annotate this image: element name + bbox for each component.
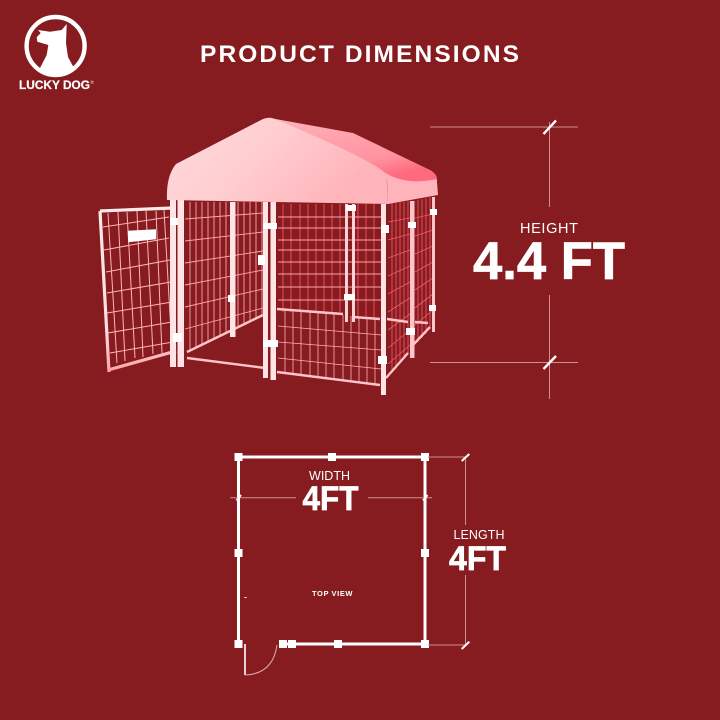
door frame bbox=[100, 208, 176, 372]
hinge post tubes bbox=[170, 200, 184, 367]
roof back slope bbox=[270, 118, 437, 181]
small mark bbox=[244, 597, 246, 598]
front right wire grid bbox=[278, 311, 381, 384]
roof front face bbox=[167, 118, 388, 204]
right side wire grids bbox=[388, 197, 433, 373]
height guide lines bbox=[430, 122, 578, 399]
kennel illustration bbox=[100, 118, 438, 395]
width tick marks bbox=[236, 495, 428, 500]
post clamps bbox=[170, 205, 437, 364]
enclosure outline bbox=[238, 457, 425, 644]
height tick marks bbox=[544, 120, 556, 369]
posts bbox=[170, 197, 437, 395]
back wire grid bbox=[283, 204, 374, 318]
left side wire grid bbox=[185, 202, 263, 350]
title: PRODUCT DIMENSIONS bbox=[200, 41, 519, 68]
bottom rails bbox=[187, 309, 430, 385]
height label: HEIGHT bbox=[520, 221, 578, 237]
door label plate bbox=[128, 229, 156, 242]
height value: 4.4 FT bbox=[473, 232, 625, 291]
roof end face bbox=[384, 170, 438, 204]
post markers bbox=[234, 453, 429, 648]
length value: 4FT bbox=[449, 540, 506, 578]
width label: WIDTH bbox=[309, 469, 350, 483]
door swing bbox=[244, 644, 246, 675]
width dimension bbox=[230, 469, 432, 518]
width guide lines bbox=[230, 497, 432, 499]
logo ring bbox=[27, 17, 85, 75]
door bbox=[100, 208, 176, 372]
length guide lines bbox=[428, 457, 466, 645]
top view plan bbox=[234, 453, 429, 675]
icon: dog silhouette bbox=[37, 24, 74, 75]
logo: Lucky Dog bbox=[19, 17, 94, 92]
left side mid post bbox=[230, 202, 236, 337]
gate posts bbox=[263, 202, 268, 378]
right side posts bbox=[410, 201, 414, 358]
door wire grid bbox=[103, 210, 173, 363]
length dimension bbox=[428, 454, 506, 649]
back wire grid rails bbox=[278, 217, 381, 300]
height dimension bbox=[430, 120, 625, 399]
front right corner post bbox=[381, 204, 386, 395]
back posts bbox=[345, 204, 348, 322]
top view label: TOP VIEW bbox=[312, 589, 353, 598]
width value: 4FT bbox=[302, 480, 358, 518]
length tick marks bbox=[462, 454, 469, 649]
logo wordmark: LUCKY DOG bbox=[19, 80, 90, 92]
length label: LENGTH bbox=[454, 528, 504, 542]
door arc bbox=[245, 645, 277, 675]
registered mark: ® bbox=[90, 79, 94, 85]
